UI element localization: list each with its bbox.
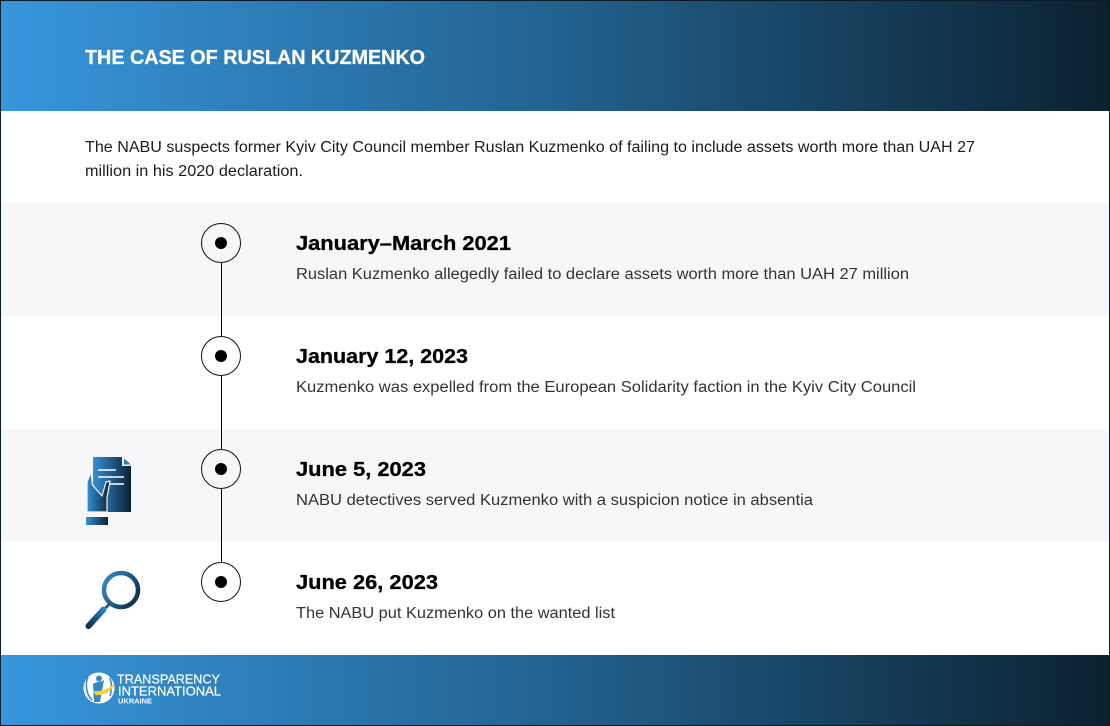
logo: Transparency International Ukraine: INTERNATIONAL <box>118 684 221 698</box>
event: June 5, 2023: NABU detectives served Kuzmenko with a suspicion notice in absentia <box>296 492 813 509</box>
event: January 12, 2023 <box>202 336 916 396</box>
logo: Transparency International Ukraine <box>84 672 221 706</box>
timeline line <box>220 243 222 582</box>
logo: Transparency International Ukraine: TRANSPARENCY <box>117 672 220 686</box>
event: January 12, 2023: Kuzmenko was expelled from the European Solidarity faction in the Kyiv City Council <box>296 379 916 396</box>
intro text <box>85 139 975 180</box>
title: THE CASE OF RUSLAN KUZMENKO <box>85 47 425 69</box>
event: January–March 2021: January–March 2021 <box>296 232 511 255</box>
event: January–March 2021 <box>202 224 909 283</box>
intro text: million in his 2020 declaration. <box>85 163 303 180</box>
icon: magnifying glass <box>88 573 138 626</box>
footer band <box>0 655 1110 726</box>
intro text: The NABU suspects former Kyiv City Council member Ruslan Kuzmenko of failing to include assets worth more than UAH 27 <box>85 139 975 156</box>
event: June 5, 2023: June 5, 2023 <box>296 458 426 481</box>
event: June 26, 2023: June 26, 2023 <box>296 571 438 594</box>
header band <box>0 0 1110 111</box>
event: January–March 2021: Ruslan Kuzmenko allegedly failed to declare assets worth more than UAH 27 million <box>296 266 909 283</box>
icon: hand holding document <box>86 457 131 525</box>
event: January 12, 2023: January 12, 2023 <box>296 345 468 368</box>
event: June 26, 2023 <box>202 562 616 622</box>
event: June 5, 2023 <box>202 450 813 509</box>
row backgrounds <box>0 203 1110 542</box>
event: June 26, 2023: The NABU put Kuzmenko on the wanted list <box>296 605 616 622</box>
logo: Transparency International Ukraine: UKRAINE <box>118 698 152 706</box>
